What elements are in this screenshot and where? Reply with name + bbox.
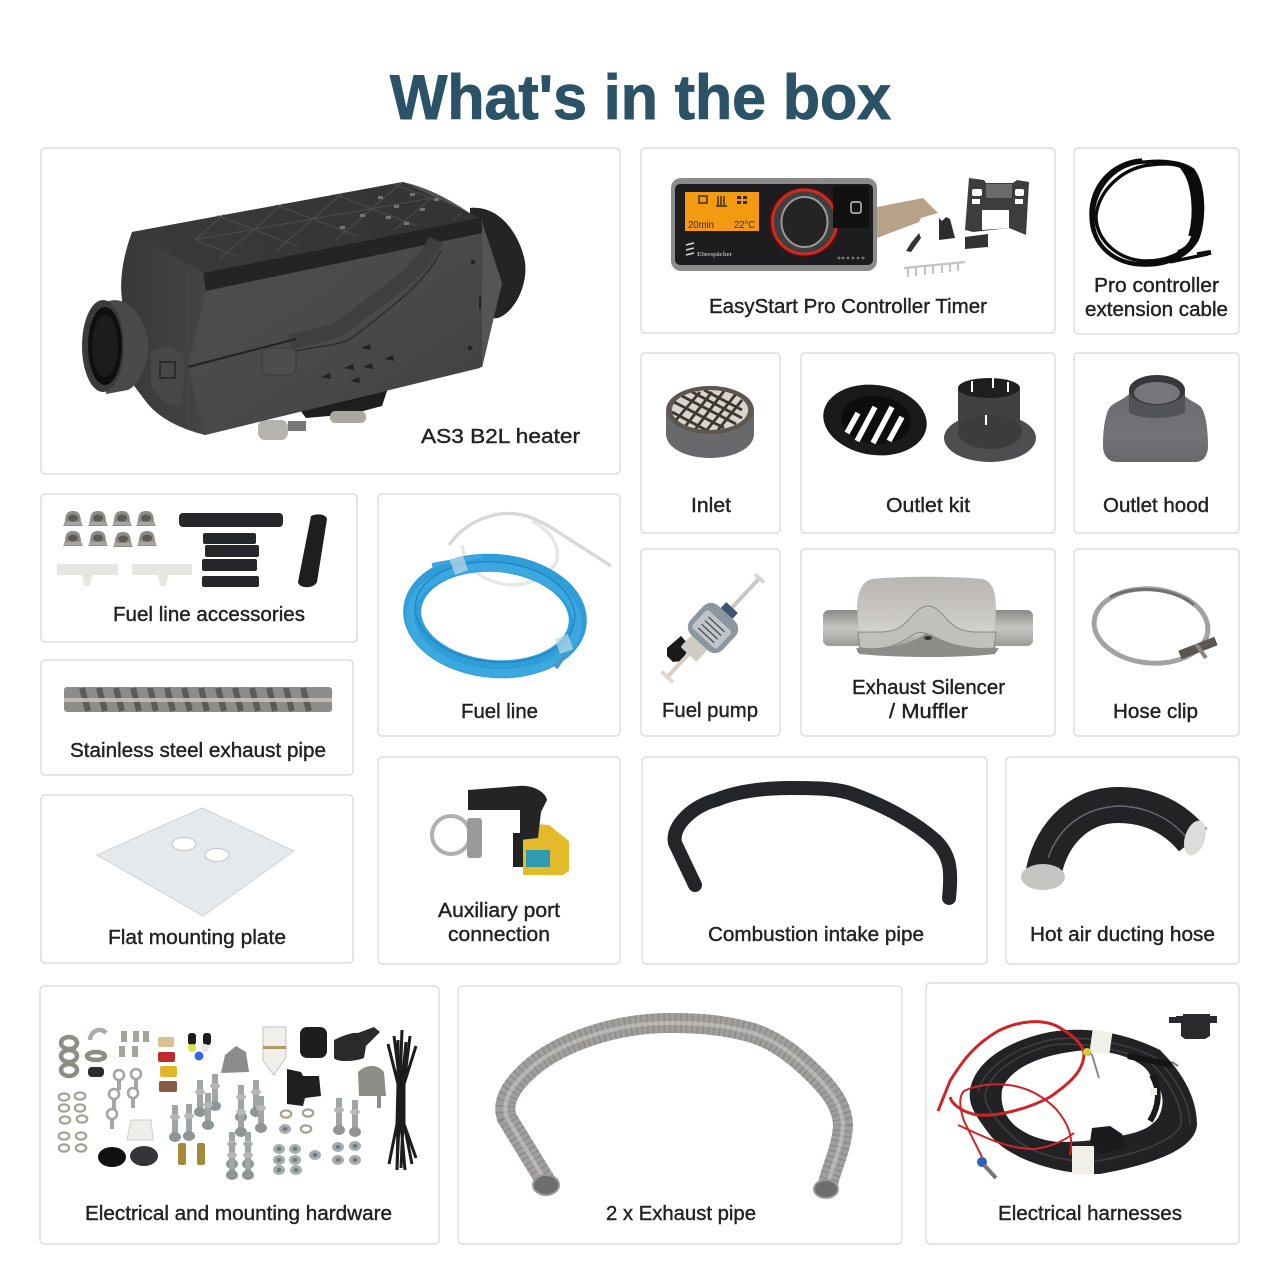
panel: Combustion intake pipe: [642, 757, 987, 964]
label line 2: / Muffler: [889, 700, 968, 723]
illustration: black sleeves: [179, 513, 327, 587]
panel: 2 x Exhaust pipe: [458, 986, 902, 1244]
display reading: time: 20min: [688, 219, 714, 231]
illustration: hood: [1103, 375, 1208, 462]
panel: Electrical and mounting hardware: [40, 986, 439, 1244]
panel: Hot air ducting hose: [1006, 757, 1239, 964]
label line 1: Auxiliary port: [438, 899, 560, 922]
illustration: flexible exhaust pipe: [505, 1023, 843, 1198]
label: Flat mounting plate: [108, 926, 286, 949]
illustration: heater unit: [82, 182, 525, 440]
illustration: black outlet vent: [819, 378, 931, 462]
illustration: duct hose: [1021, 805, 1210, 890]
illustration: harness bundle: [938, 1014, 1217, 1178]
illustration: hardware set: [59, 1027, 416, 1180]
label: 2 x Exhaust pipe: [606, 1202, 756, 1225]
illustration: straight pipe: [64, 687, 332, 712]
illustration: port and clamp: [432, 786, 569, 875]
display reading: temperature: 22°C: [734, 219, 755, 231]
illustration: clear and blue tubing: [406, 513, 611, 680]
brand wordmark: Eberspächer: [697, 251, 733, 258]
label: Fuel line accessories: [113, 603, 305, 626]
illustration: hose clips: [63, 511, 157, 547]
label: Electrical and mounting hardware: [85, 1202, 392, 1225]
panel: Outlet kit: [801, 353, 1055, 533]
label: Fuel line: [461, 700, 538, 723]
label: EasyStart Pro Controller Timer: [709, 295, 987, 318]
illustration: controller with accessories: [671, 178, 1029, 277]
panel: EasyStart Pro Controller Timer: [641, 148, 1055, 333]
label: Stainless steel exhaust pipe: [70, 739, 326, 762]
label: Outlet kit: [886, 494, 970, 517]
label line 1: Pro controller: [1094, 274, 1219, 297]
panel: Fuel line: [378, 494, 620, 736]
panel: AS3 B2L heater: [41, 148, 620, 474]
panel: Fuel line accessories: [41, 494, 357, 642]
panel: Electrical harnesses: [926, 983, 1239, 1244]
label: Electrical harnesses: [998, 1202, 1182, 1225]
label line 2: extension cable: [1085, 298, 1228, 321]
panel: Hose clip: [1074, 549, 1239, 736]
panel: Outlet hood: [1074, 353, 1239, 533]
label: Outlet hood: [1103, 494, 1209, 517]
label: AS3 B2L heater: [421, 425, 580, 448]
label line 2: connection: [448, 923, 550, 946]
label line 1: Exhaust Silencer: [852, 676, 1005, 699]
illustration: black pipe: [675, 788, 950, 898]
label: Combustion intake pipe: [708, 923, 924, 946]
illustration: coiled cable: [1091, 160, 1211, 265]
illustration: clip: [1091, 584, 1216, 668]
label: Inlet: [691, 494, 731, 517]
title: What's in the box: [390, 63, 891, 133]
panel: Exhaust Silencer / Muffler: [801, 549, 1055, 736]
illustration: outlet ring: [944, 378, 1036, 462]
panel: Auxiliary port connection: [378, 757, 620, 964]
panel: Stainless steel exhaust pipe: [41, 660, 353, 775]
label: Hot air ducting hose: [1030, 923, 1215, 946]
label: Hose clip: [1113, 700, 1198, 723]
panel: Inlet: [641, 353, 780, 533]
illustration: inlet grille: [666, 386, 754, 458]
illustration: muffler: [823, 577, 1033, 657]
label: Fuel pump: [662, 699, 758, 722]
illustration: plate: [97, 808, 294, 916]
panel: Pro controller extension cable: [1074, 148, 1239, 334]
panel: Flat mounting plate: [41, 795, 353, 963]
illustration: pump: [650, 562, 777, 693]
panel: Fuel pump: [641, 549, 780, 736]
illustration: T connectors: [57, 564, 192, 586]
